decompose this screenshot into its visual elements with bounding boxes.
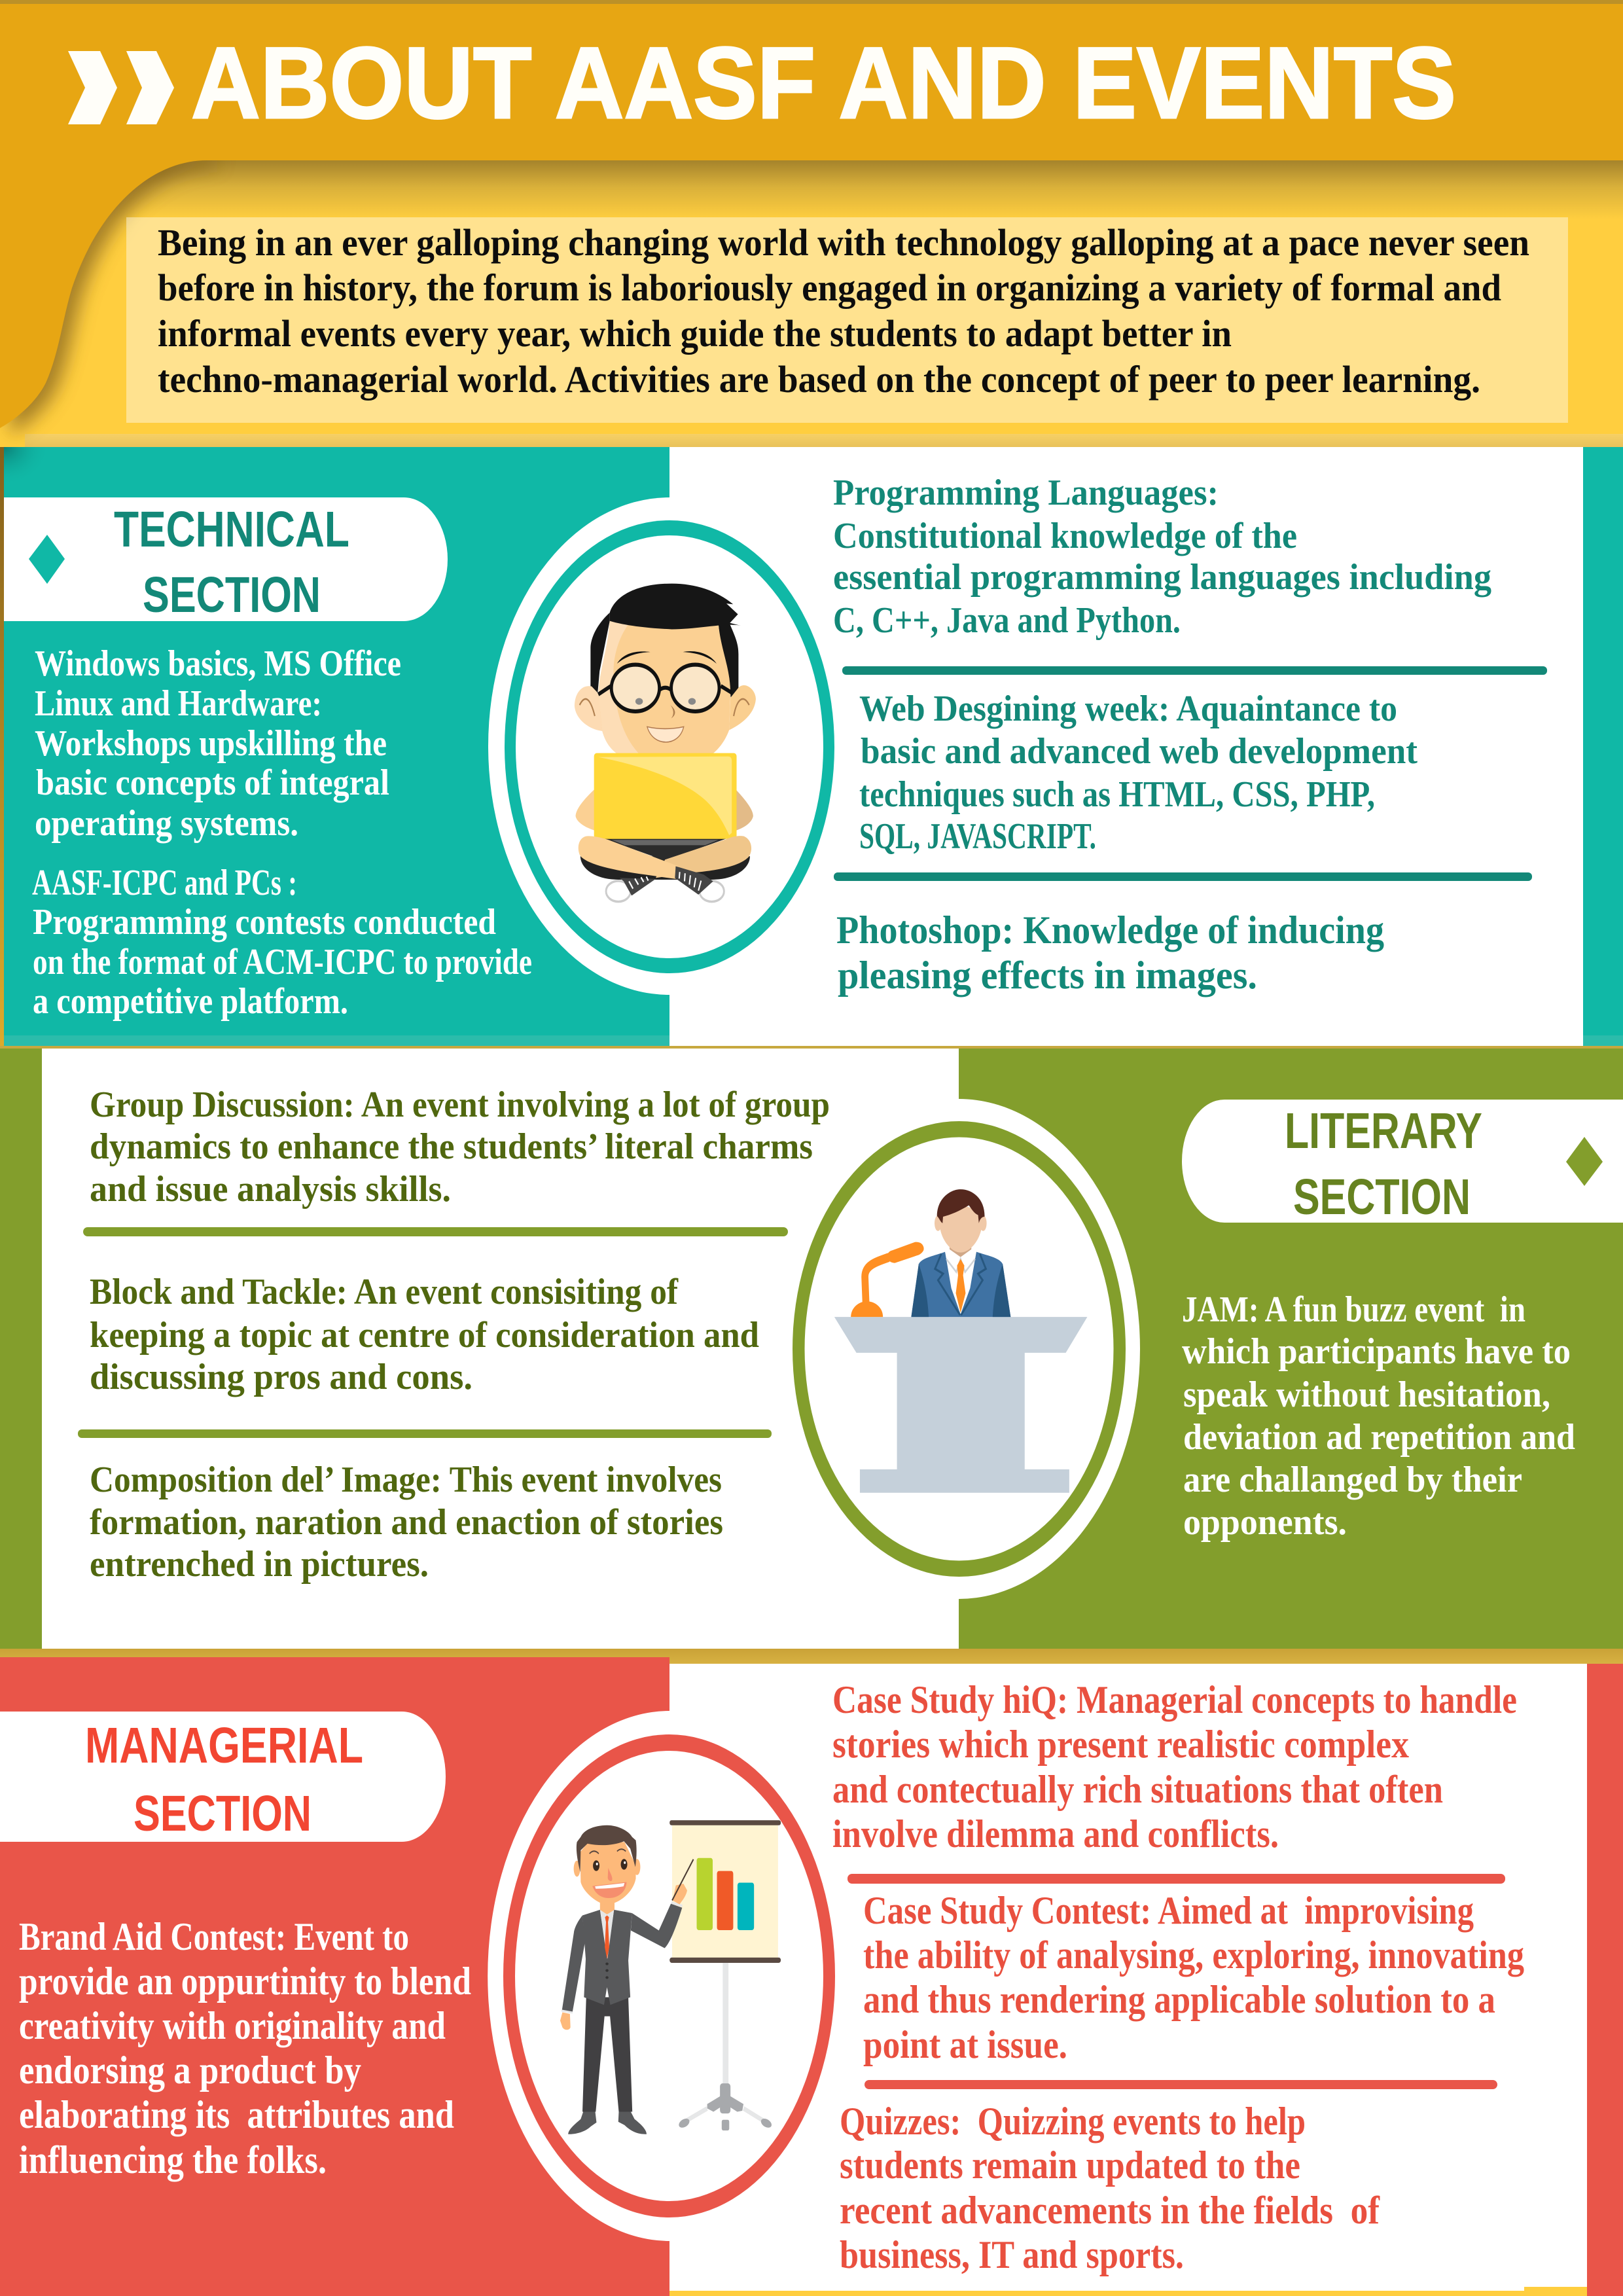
text: programming languages: Constitutional knowledge of the [833,516,1297,556]
icon: diamond [1566,1137,1603,1186]
text: AASF-ICPC: Programming contests conducted [33,902,496,942]
text: block and tackle: keeping a topic at centre of consideration and [90,1315,759,1355]
text: case study contest: and thus rendering applicable solution to a [863,1978,1495,2021]
text: case study contest [863,1889,1524,2066]
text: brand aid contest: endorsing a product by [19,2049,361,2092]
text: block and tackle: discussing pros and cons. [90,1357,473,1397]
intro text box: techno-managerial world. Activities are based on the concept of peer to peer learning. [158,358,1480,401]
icon: double chevron [68,51,174,124]
text: photoshop: pleasing effects in images. [838,954,1257,997]
text: composition del image [90,1460,723,1585]
intro text box [126,217,1568,423]
text: brand aid contest: elaborating its attributes and [19,2093,454,2136]
medallion ring [488,1711,835,2241]
text: AASF-ICPC: a competitive platform. [33,981,348,1022]
heading pill: managerial section: MANAGERIAL [85,1717,363,1774]
panel: header [0,0,1623,465]
text: case study contest: point at issue. [863,2023,1067,2066]
text: composition del image: formation, naration and enaction of stories [90,1502,723,1543]
text: group discussion: dynamics to enhance the students’ literal charms [90,1126,813,1167]
intro text box: informal events every year, which guide the students to adapt better in [158,312,1232,355]
text: JAM: deviation ad repetition and [1183,1417,1575,1458]
text: photoshop: Photoshop: Knowledge of inducing [836,908,1384,952]
text: brand aid contest: influencing the folks. [19,2138,327,2181]
heading pill: technical section [4,497,448,623]
text: web designing [859,689,1418,857]
text: brand aid contest: Brand Aid Contest: Event to [19,1915,409,1958]
text: quizzes: recent advancements in the fields of [840,2189,1380,2232]
text: case study contest: the ability of analysing, exploring, innovating [863,1933,1524,1977]
text: case study hiQ [832,1678,1517,1856]
medallion ring [793,1099,1140,1599]
icon: presenter with chart [560,1820,781,2134]
text: web designing: techniques such as HTML, CSS, PHP, [859,774,1375,815]
text: JAM: JAM: A fun buzz event in [1182,1289,1525,1330]
text: group discussion: Group Discussion: An event involving a lot of group [90,1085,830,1125]
panel: technical section [0,447,1623,1049]
text: web designing: SQL, JAVASCRIPT. [859,816,1096,857]
panel: managerial section [0,1657,1623,2296]
text: case study hiQ: and contectually rich situations that often [832,1768,1443,1811]
text: quizzes: students remain updated to the [840,2144,1300,2187]
heading pill: managerial section [0,1712,446,1842]
heading pill: managerial section: SECTION [134,1785,312,1842]
icon: boy with laptop [575,584,756,902]
text: programming languages: essential programming languages including [833,557,1491,598]
text: web designing: basic and advanced web development [861,731,1418,772]
text: case study hiQ: involve dilemma and conflicts. [832,1812,1279,1856]
text: JAM [1182,1289,1575,1543]
icon: speaker at podium [834,1189,1087,1493]
text: block and tackle: Block and Tackle: An event consisiting of [90,1272,679,1312]
text: quizzes: Quizzes: Quizzing events to help [840,2100,1306,2143]
text: quizzes [840,2100,1380,2276]
heading pill: literary section: LITERARY [1285,1103,1482,1159]
text: JAM: are challanged by their [1183,1460,1522,1500]
medallion ring [488,497,834,995]
text: programming languages: Programming Languages: [833,473,1219,513]
text: AASF-ICPC [32,863,532,1022]
text: JAM: speak without hesitation, [1183,1374,1550,1415]
title: ABOUT AASF AND EVENTS [191,26,1456,139]
text: windows basics [35,643,401,844]
text: JAM: opponents. [1183,1502,1347,1543]
text: brand aid contest: provide an oppurtinity to blend [19,1960,471,2003]
text: group discussion [90,1085,830,1210]
heading pill: technical section: TECHNICAL [114,501,349,558]
text: group discussion: and issue analysis skills. [90,1169,451,1210]
text: web designing: Web Desgining week: Aquaintance to [859,689,1397,729]
text: windows basics: Windows basics, MS Office [35,643,401,684]
icon: diamond [29,535,65,584]
text: windows basics: Workshops upskilling the [35,723,387,764]
shape: orange curve [0,157,207,428]
text: windows basics: basic concepts of integral [36,762,389,803]
text: programming languages [833,473,1491,641]
text: JAM: which participants have to [1182,1331,1571,1372]
text: photoshop [836,908,1384,997]
panel: literary section [0,1049,1623,1649]
text: case study contest: Case Study Contest: Aimed at improvising [863,1889,1474,1932]
text: block and tackle [90,1272,759,1397]
text: programming languages: C, C++, Java and Python. [833,600,1181,641]
text: windows basics: Linux and Hardware: [35,683,322,724]
text: AASF-ICPC: on the format of ACM-ICPC to provide [33,942,532,982]
heading pill: technical section: SECTION [143,567,321,623]
heading pill: literary section [1182,1100,1623,1225]
text: brand aid contest [19,1915,471,2181]
text: composition del image: entrenched in pictures. [90,1544,429,1585]
intro text box: before in history, the forum is laboriously engaged in organizing a variety of formal and [158,266,1501,309]
heading pill: literary section: SECTION [1293,1169,1471,1225]
intro text box: Being in an ever galloping changing world with technology galloping at a pace never seen [158,221,1529,264]
text: AASF-ICPC: AASF-ICPC and PCs : [32,863,297,903]
text: case study hiQ: Case Study hiQ: Managerial concepts to handle [832,1678,1517,1721]
text: brand aid contest: creativity with originality and [19,2004,446,2047]
text: case study hiQ: stories which present realistic complex [832,1723,1409,1766]
text: composition del image: Composition del’ Image: This event involves [90,1460,722,1500]
text: quizzes: business, IT and sports. [840,2233,1184,2276]
text: windows basics: operating systems. [35,803,298,844]
